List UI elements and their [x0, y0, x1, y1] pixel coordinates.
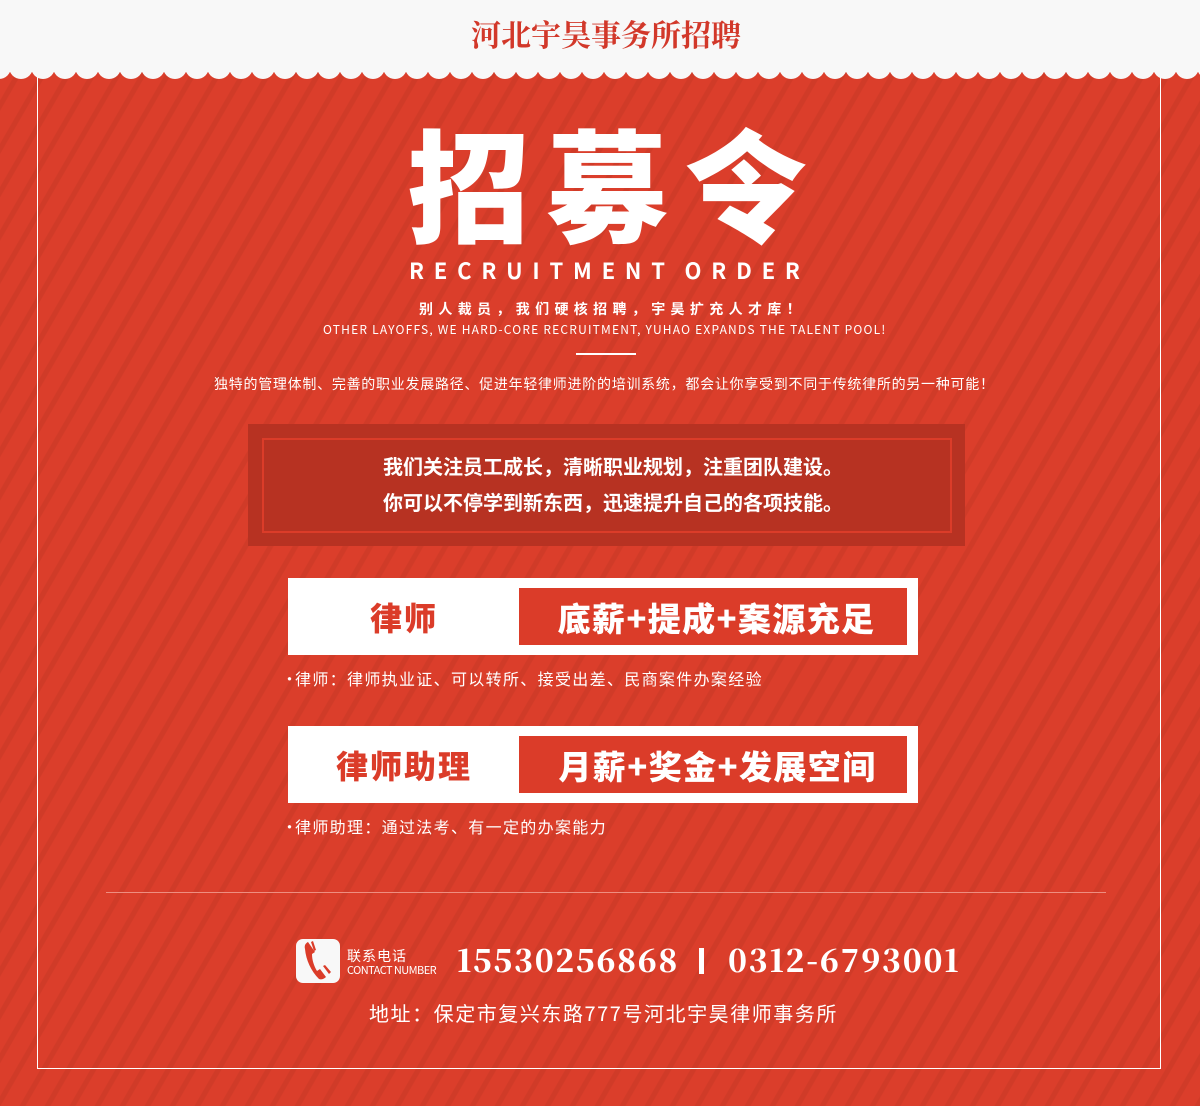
- header title: 河北宇昊事务所招聘: [471, 20, 741, 53]
- position name: 律师助理: [336, 742, 472, 788]
- position name: 律师: [370, 594, 438, 640]
- pay box: [519, 588, 907, 645]
- pay box: 底薪+提成+案源充足: [558, 593, 875, 641]
- english slogan: OTHER LAYOFFS, WE HARD-CORE RECRUITMENT, YUHAO EXPANDS THE TALENT POOL!: [323, 321, 886, 338]
- landline: 0312-6793001: [728, 936, 960, 981]
- icon: phone: [296, 939, 340, 983]
- pay box: 月薪+奖金+发展空间: [558, 741, 877, 789]
- values line 1: 我们关注员工成长，清晰职业规划，注重团队建设。: [383, 451, 843, 480]
- lawyer requirements: ·: [282, 666, 298, 690]
- footer divider: [106, 892, 1106, 893]
- main heading: 招募令: [408, 92, 823, 269]
- intro text: 独特的管理体制、完善的职业发展路径、促进年轻律师进阶的培训系统，都会让你享受到不同于传统律所的另一种可能！: [214, 374, 995, 394]
- values line 2: 你可以不停学到新东西，迅速提升自己的各项技能。: [383, 487, 843, 516]
- scalloped header band: [0, 0, 1200, 79]
- lawyer requirements: 律师：律师执业证、可以转所、接受出差、民商案件办案经验: [295, 666, 763, 690]
- assistant requirements: 律师助理：通过法考、有一定的办案能力: [295, 814, 607, 838]
- phone numbers: 15530256868: [457, 936, 679, 981]
- panel: assistant position: [288, 726, 918, 803]
- pay box: [519, 736, 907, 793]
- panel: lawyer position: [288, 578, 918, 655]
- contact label english: CONTACT NUMBER: [347, 962, 436, 978]
- contact label: 联系电话: [347, 946, 407, 966]
- assistant requirements: ·: [282, 814, 298, 838]
- number separator: [699, 948, 704, 974]
- address: 地址：保定市复兴东路777号河北宇昊律师事务所: [369, 998, 838, 1027]
- english heading: RECRUITMENT ORDER: [409, 254, 810, 286]
- panel: company values: [248, 424, 965, 546]
- inner frame: [262, 438, 952, 533]
- slogan: 别人裁员，我们硬核招聘，宇昊扩充人才库！: [419, 299, 806, 319]
- short divider: [576, 353, 636, 355]
